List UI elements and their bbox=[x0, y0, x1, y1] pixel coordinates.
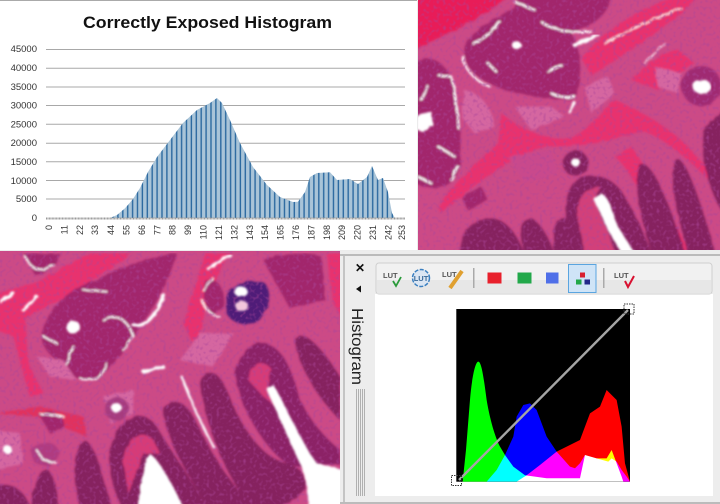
panel: upper right micrograph bbox=[415, 0, 720, 253]
pale stroma patches bbox=[0, 333, 233, 470]
tissue speckle bbox=[0, 251, 340, 504]
x axis labels: 242 bbox=[384, 225, 394, 240]
toolbar bbox=[376, 263, 712, 294]
x axis labels: 154 bbox=[260, 225, 270, 240]
LUT reset icon bbox=[412, 270, 430, 286]
LUT edit icon bbox=[442, 270, 462, 288]
LUT reset icon: LUT bbox=[414, 274, 429, 283]
dark mucosal folds bbox=[460, 66, 720, 253]
white cracks bbox=[25, 257, 220, 463]
blue channel bbox=[487, 403, 630, 482]
x axis labels: 198 bbox=[322, 225, 332, 240]
LUT diagonal line bbox=[459, 310, 628, 480]
x axis labels: 110 bbox=[198, 225, 208, 239]
x axis labels: 77 bbox=[152, 225, 162, 235]
tissue speckle bbox=[418, 0, 720, 250]
x axis labels bbox=[44, 225, 407, 240]
y axis labels: 40000 bbox=[11, 63, 37, 74]
x axis labels: 11 bbox=[60, 225, 70, 234]
x axis labels: 143 bbox=[245, 225, 255, 240]
x axis labels: 209 bbox=[337, 225, 347, 240]
x axis labels: 176 bbox=[291, 225, 301, 240]
LUT check icon: LUT bbox=[383, 271, 398, 280]
separator bbox=[603, 268, 604, 288]
x axis baseline bbox=[46, 218, 405, 220]
x axis labels: 44 bbox=[106, 225, 116, 235]
x axis labels: 253 bbox=[397, 225, 407, 240]
y axis labels: 25000 bbox=[11, 120, 37, 130]
pink fold cores bbox=[123, 363, 277, 493]
histogram bars bbox=[110, 98, 395, 218]
collapse arrow bbox=[356, 286, 361, 292]
all channels button bbox=[568, 264, 596, 292]
x axis labels: 0 bbox=[44, 225, 54, 230]
separator bbox=[473, 268, 474, 288]
x axis labels: 220 bbox=[352, 225, 362, 240]
blue channel button bbox=[546, 272, 558, 284]
LUT check icon bbox=[383, 271, 401, 286]
upper handle bbox=[624, 304, 634, 314]
y axis labels: 30000 bbox=[11, 100, 37, 112]
acinar lobules bbox=[415, 0, 611, 210]
y axis labels: 15000 bbox=[11, 157, 37, 168]
red channel button bbox=[488, 272, 502, 284]
red channel bbox=[517, 390, 630, 482]
panel: lower left micrograph bbox=[0, 251, 343, 504]
LUT apply icon bbox=[614, 271, 634, 287]
x axis labels: 165 bbox=[276, 225, 286, 240]
bright fibrous bands bbox=[415, 0, 720, 250]
y axis labels: 10000 bbox=[11, 176, 37, 187]
chart title: Correctly Exposed Histogram bbox=[83, 13, 332, 32]
green channel button bbox=[518, 272, 532, 284]
y axis labels: 20000 bbox=[11, 138, 37, 149]
x axis labels: 132 bbox=[230, 225, 240, 240]
panel: bar chart bbox=[0, 0, 417, 250]
pale stroma patches bbox=[461, 66, 682, 162]
x axis labels: 22 bbox=[75, 225, 85, 235]
x axis labels: 187 bbox=[306, 225, 316, 240]
bright fibrous bands bbox=[0, 253, 342, 437]
green channel bbox=[463, 362, 623, 482]
pink fold core bbox=[577, 187, 615, 253]
x axis labels: 88 bbox=[168, 225, 178, 235]
RGB histogram plot bbox=[452, 304, 634, 486]
x axis labels: 33 bbox=[90, 225, 100, 235]
dark mucosal folds bbox=[0, 336, 340, 504]
stained dark purple lobule bbox=[227, 281, 269, 324]
panel: histogram tool window bbox=[340, 251, 720, 504]
lower handle bbox=[452, 476, 462, 486]
LUT apply icon: LUT bbox=[614, 271, 629, 280]
y axis gridlines bbox=[46, 50, 405, 199]
vertical Histogram label: Histogram bbox=[348, 308, 365, 385]
LUT edit icon: LUT bbox=[442, 270, 457, 279]
x axis labels: 99 bbox=[183, 225, 193, 235]
white lumens bbox=[416, 35, 711, 253]
resize grip bbox=[356, 389, 364, 496]
white lumens bbox=[0, 255, 343, 504]
content area bbox=[375, 294, 713, 496]
x axis labels: 55 bbox=[122, 225, 132, 235]
y axis labels: 0 bbox=[32, 213, 37, 224]
x axis labels: 66 bbox=[137, 225, 147, 235]
y axis labels: 35000 bbox=[11, 82, 37, 93]
y axis labels: 5000 bbox=[16, 194, 37, 205]
acinar lobules bbox=[23, 253, 325, 467]
y axis labels: 45000 bbox=[11, 44, 37, 55]
x axis labels: 121 bbox=[214, 225, 224, 240]
y axis labels bbox=[11, 44, 37, 224]
x axis labels: 231 bbox=[368, 225, 378, 240]
white cracks bbox=[418, 2, 681, 183]
close button: ✕ bbox=[355, 261, 365, 275]
